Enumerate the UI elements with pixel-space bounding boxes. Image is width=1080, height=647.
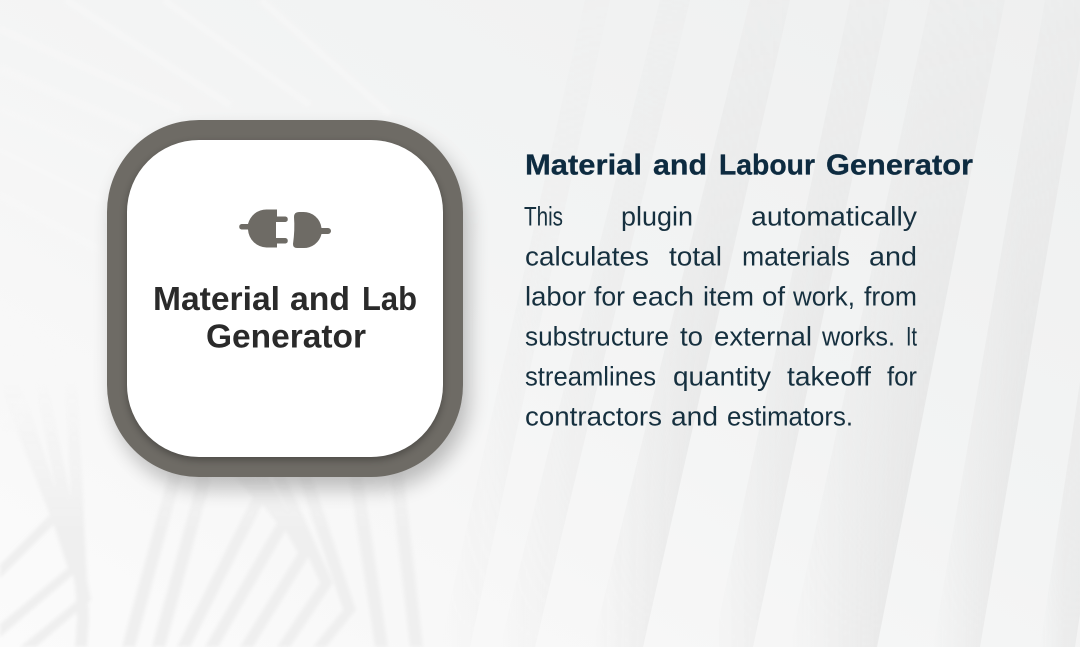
ring inner shadow (127, 143, 443, 460)
card shadow (113, 132, 469, 489)
body text: works. (821, 322, 895, 352)
heading (525, 149, 973, 181)
heading: Material (525, 149, 642, 181)
body text: for (594, 282, 625, 312)
heading: Generator (826, 149, 973, 181)
card title: Material (153, 280, 280, 317)
body text: takeoff (787, 362, 872, 392)
body text (524, 202, 918, 432)
heading: Labour (719, 149, 815, 181)
body text: each (632, 282, 694, 312)
body text: calculates (525, 242, 649, 272)
body text: streamlines (525, 362, 656, 392)
card title: Generator (206, 318, 366, 354)
body text: and (869, 242, 917, 272)
body text: plugin (621, 202, 693, 232)
body text: This (524, 202, 563, 232)
body text: and (671, 402, 718, 432)
body text: materials (742, 242, 850, 272)
body text: external (714, 322, 812, 352)
body text: for (887, 362, 917, 392)
body text: to (680, 322, 703, 352)
body text: It (906, 322, 917, 352)
body text: estimators. (727, 402, 853, 432)
icon: plug and socket (239, 209, 331, 248)
card (107, 120, 469, 489)
card title: Lab (362, 280, 417, 317)
card title (153, 280, 417, 354)
body text: contractors (525, 402, 662, 432)
background (657, 0, 1080, 647)
body text: substructure (525, 322, 669, 352)
body text: total (669, 242, 722, 272)
heading: and (653, 149, 707, 181)
body text: work, (792, 282, 855, 312)
body text: of (762, 282, 785, 312)
body text: item (703, 282, 754, 312)
body text: automatically (751, 202, 918, 232)
body text: labor (525, 282, 586, 312)
body text: from (864, 282, 917, 312)
card white face (127, 140, 443, 457)
card title: and (290, 280, 350, 317)
body text: quantity (673, 362, 772, 392)
card outer ring (107, 120, 463, 477)
